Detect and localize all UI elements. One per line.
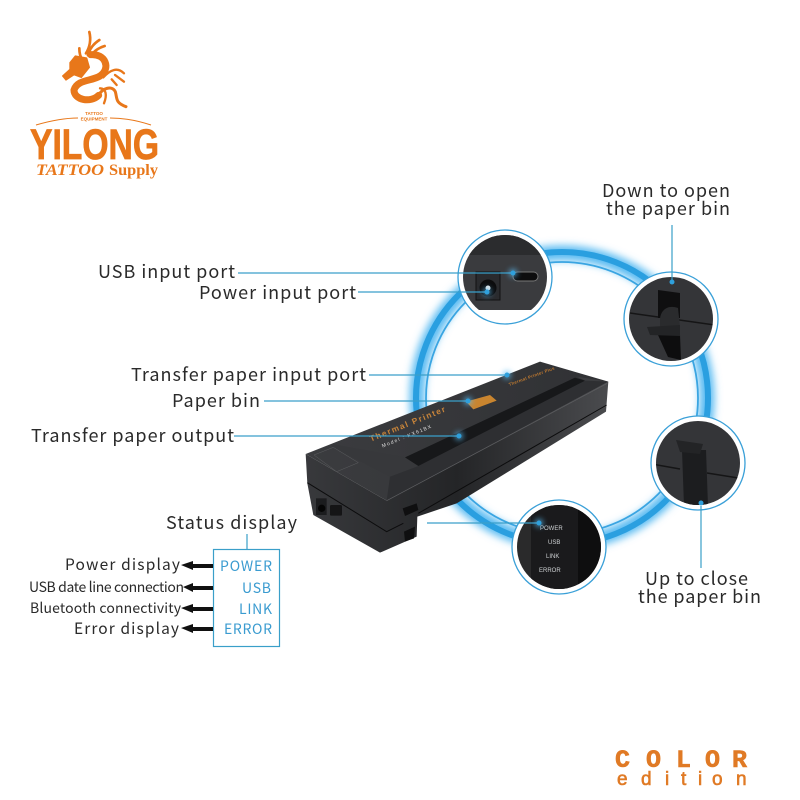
printer top face [306, 362, 608, 501]
edition badge: edition [617, 769, 747, 790]
printer label text: Thermal Printer [368, 404, 447, 444]
callout labels: Down to open [602, 177, 730, 203]
paper slot [405, 378, 585, 466]
side latch [403, 503, 418, 542]
logo: Yilong Tattoo Supply [30, 32, 159, 179]
logo: Yilong Tattoo Supply: EQUIPMENT [81, 116, 108, 122]
orange badge [466, 395, 497, 409]
callout labels: Status display [166, 509, 298, 535]
callout labels [31, 177, 761, 609]
status panel on printer [314, 447, 358, 472]
status legend: USB date line connection [29, 577, 184, 597]
edition badge: COLOR [615, 746, 747, 775]
edition badge [615, 746, 747, 790]
callout labels: USB input port [98, 258, 235, 284]
callout labels: Paper bin [172, 387, 260, 413]
inset: status LEDs: POWER [540, 526, 563, 532]
callout labels: Power input port [199, 279, 356, 305]
inset: open bin latch [624, 272, 718, 366]
status legend [29, 550, 280, 646]
printer body: Model : KX61BX [381, 424, 433, 450]
dc port and usb [316, 498, 327, 515]
printer body: Thermal Printer Plus [508, 366, 556, 387]
inset: status LEDs: ERROR [539, 568, 561, 574]
inset: status LEDs: LINK [546, 554, 559, 560]
status legend: Power display [65, 553, 180, 575]
glossy top strip [387, 381, 608, 501]
printer front side [306, 382, 608, 553]
icon: orange dragon [63, 32, 126, 107]
status legend: Error display [74, 617, 179, 639]
inset: status LEDs: USB [548, 540, 560, 546]
status legend: LINK [239, 599, 272, 619]
status legend: POWER [220, 556, 272, 576]
callout labels: the paper bin [606, 195, 730, 221]
front flap [332, 444, 418, 477]
callout labels: the paper bin [638, 583, 761, 609]
printer body [306, 362, 608, 553]
inset: status LEDs [512, 500, 608, 594]
logo small text: TATTOO [85, 111, 103, 116]
callout labels: Transfer paper input port [131, 361, 366, 387]
logo arc line [36, 118, 151, 125]
callout labels: Transfer paper output [31, 422, 234, 448]
inset: close bin latch [650, 416, 745, 510]
logo: Yilong Tattoo Supply: Supply [109, 162, 158, 179]
status legend: ERROR [224, 619, 272, 639]
leader lines and dots [234, 225, 704, 568]
arrows [181, 561, 213, 633]
lower seam lines [307, 405, 607, 532]
blue glowing ring [416, 252, 708, 544]
inset: ports [458, 230, 552, 324]
callout labels: Up to close [645, 565, 748, 591]
logo wordmark: YILONG [30, 121, 159, 169]
logo tagline: TATTOO [36, 162, 104, 179]
status legend: Bluetooth connectivity [30, 598, 182, 618]
status legend: USB [242, 578, 271, 598]
